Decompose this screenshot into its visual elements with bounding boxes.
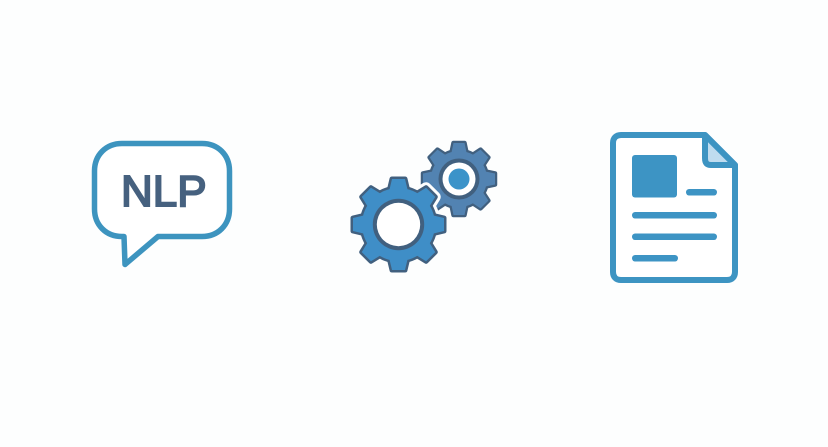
icon: interlocking gears (353, 143, 495, 270)
document page outline (613, 135, 735, 280)
NLP label: NLP (121, 167, 207, 216)
large gear (353, 179, 444, 270)
icon: document (613, 135, 735, 280)
icon: NLP speech bubble (94, 144, 230, 264)
small gear (423, 143, 495, 215)
speech bubble outline (94, 144, 230, 264)
image placeholder (632, 155, 677, 198)
text lines (632, 189, 717, 262)
folded corner (705, 135, 735, 165)
